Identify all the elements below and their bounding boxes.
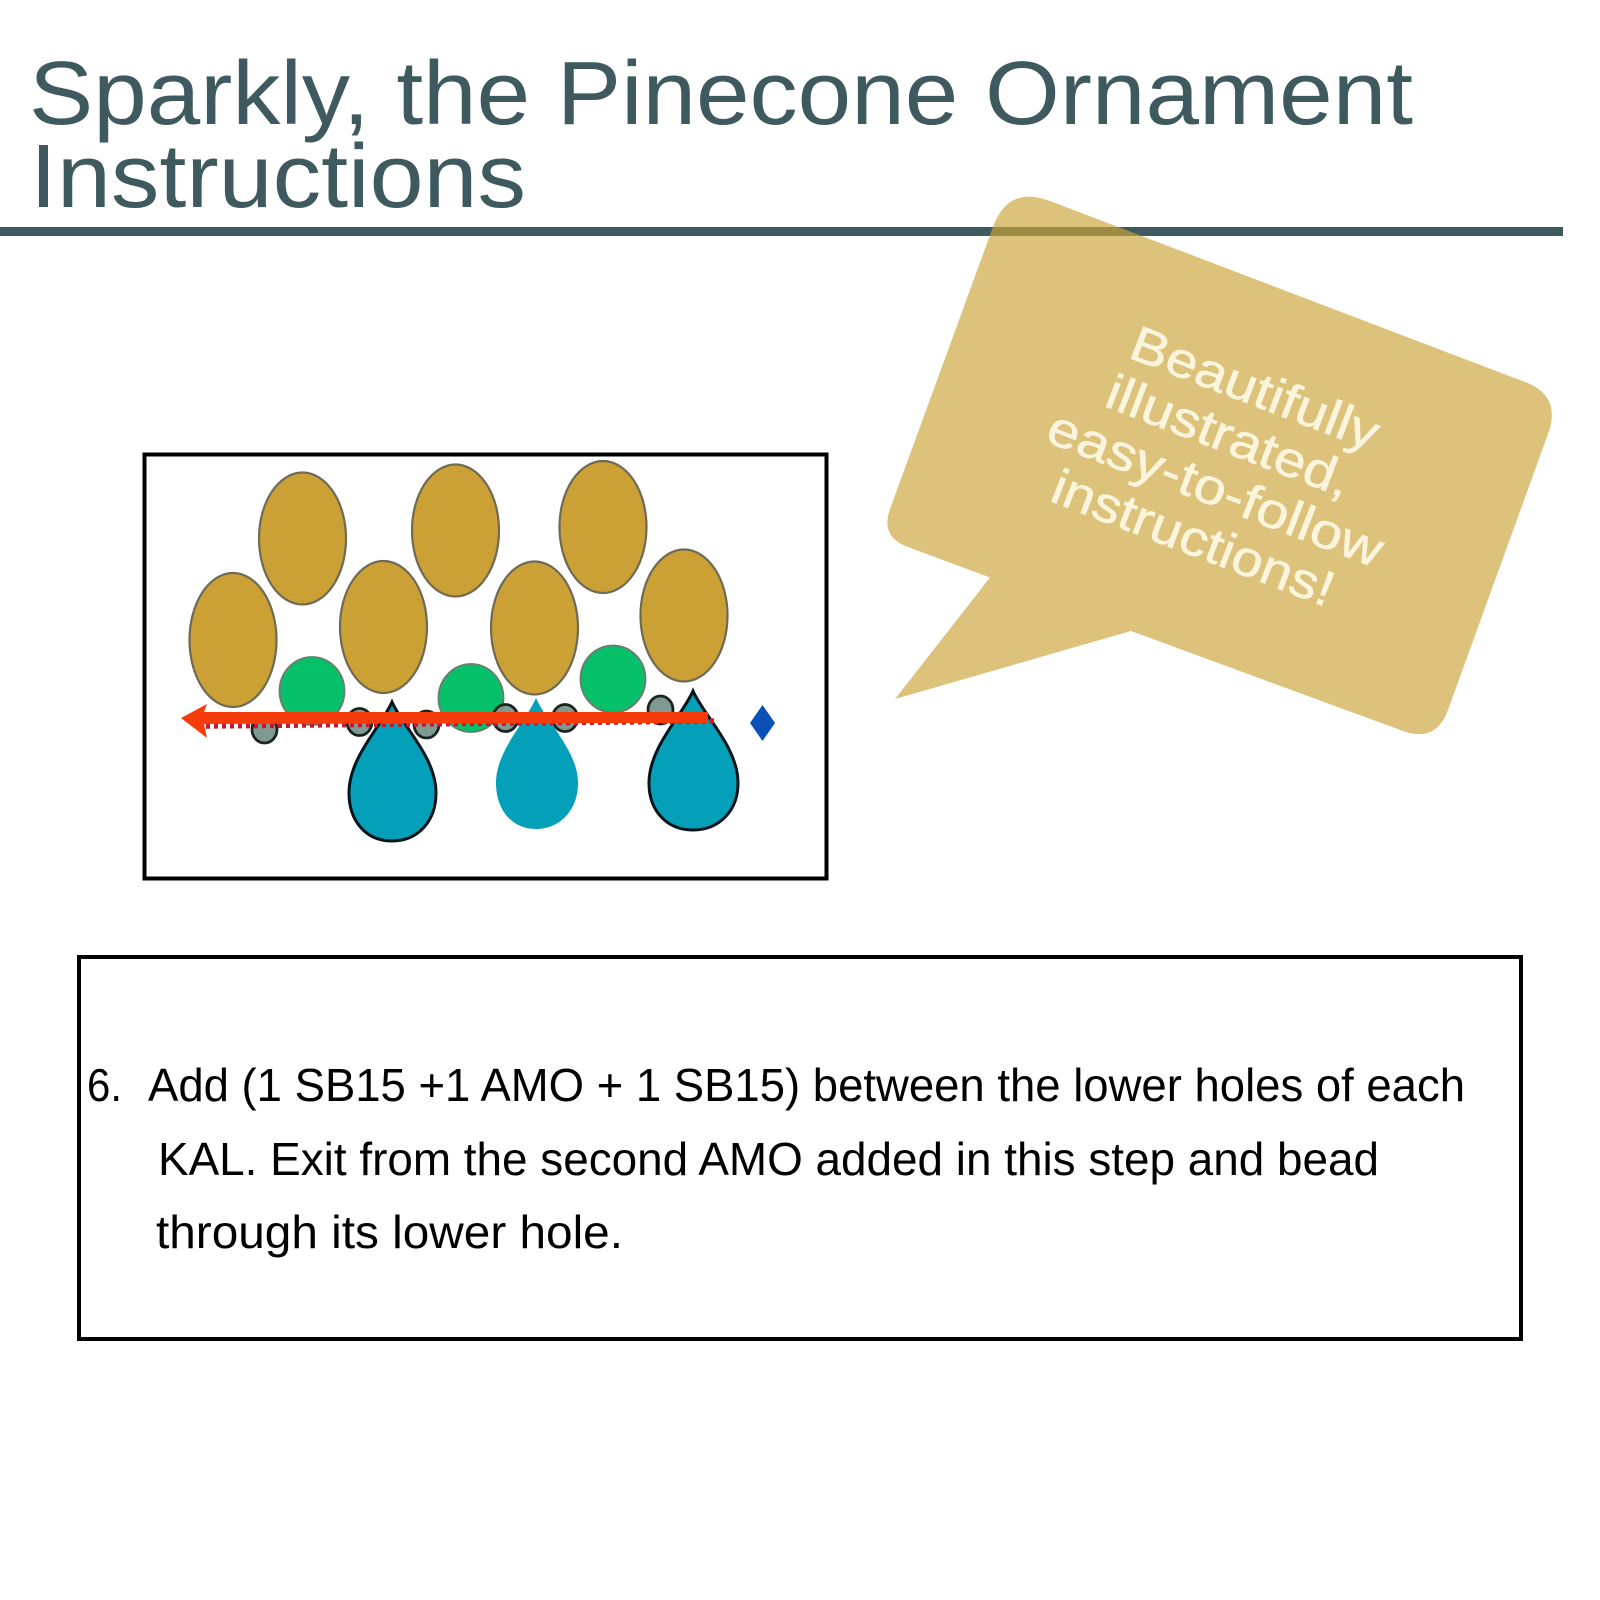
red arrow <box>181 704 708 738</box>
callout text: Beautifully <box>1123 315 1387 461</box>
callout text: instructions! <box>1044 458 1342 617</box>
step text <box>87 1059 1465 1258</box>
callout text: illustrated, <box>1099 364 1360 508</box>
title: Instructions <box>30 127 526 227</box>
gold kite beads <box>190 461 728 707</box>
blue diamond bead <box>750 705 775 741</box>
callout: speech bubble <box>887 197 1552 734</box>
step text: KAL. Exit from the second AMO added in this step and bead <box>158 1133 1379 1185</box>
dotted thread path <box>206 721 718 726</box>
callout text <box>1020 298 1431 629</box>
step text: 6. <box>87 1059 122 1111</box>
title <box>29 44 1413 227</box>
teal drop beads <box>349 691 738 841</box>
heading rule <box>0 227 1563 236</box>
title: Sparkly, the Pinecone Ornament <box>29 44 1413 144</box>
step text: through its lower hole. <box>156 1206 623 1258</box>
small gray beads <box>252 696 673 743</box>
panel: bead diagram <box>144 454 826 878</box>
step text: Add (1 SB15 +1 AMO + 1 SB15) between the lower holes of each <box>148 1059 1465 1111</box>
panel: step instruction <box>79 957 1521 1339</box>
green beads <box>280 646 646 732</box>
callout text: easy-to-follow <box>1040 399 1392 579</box>
